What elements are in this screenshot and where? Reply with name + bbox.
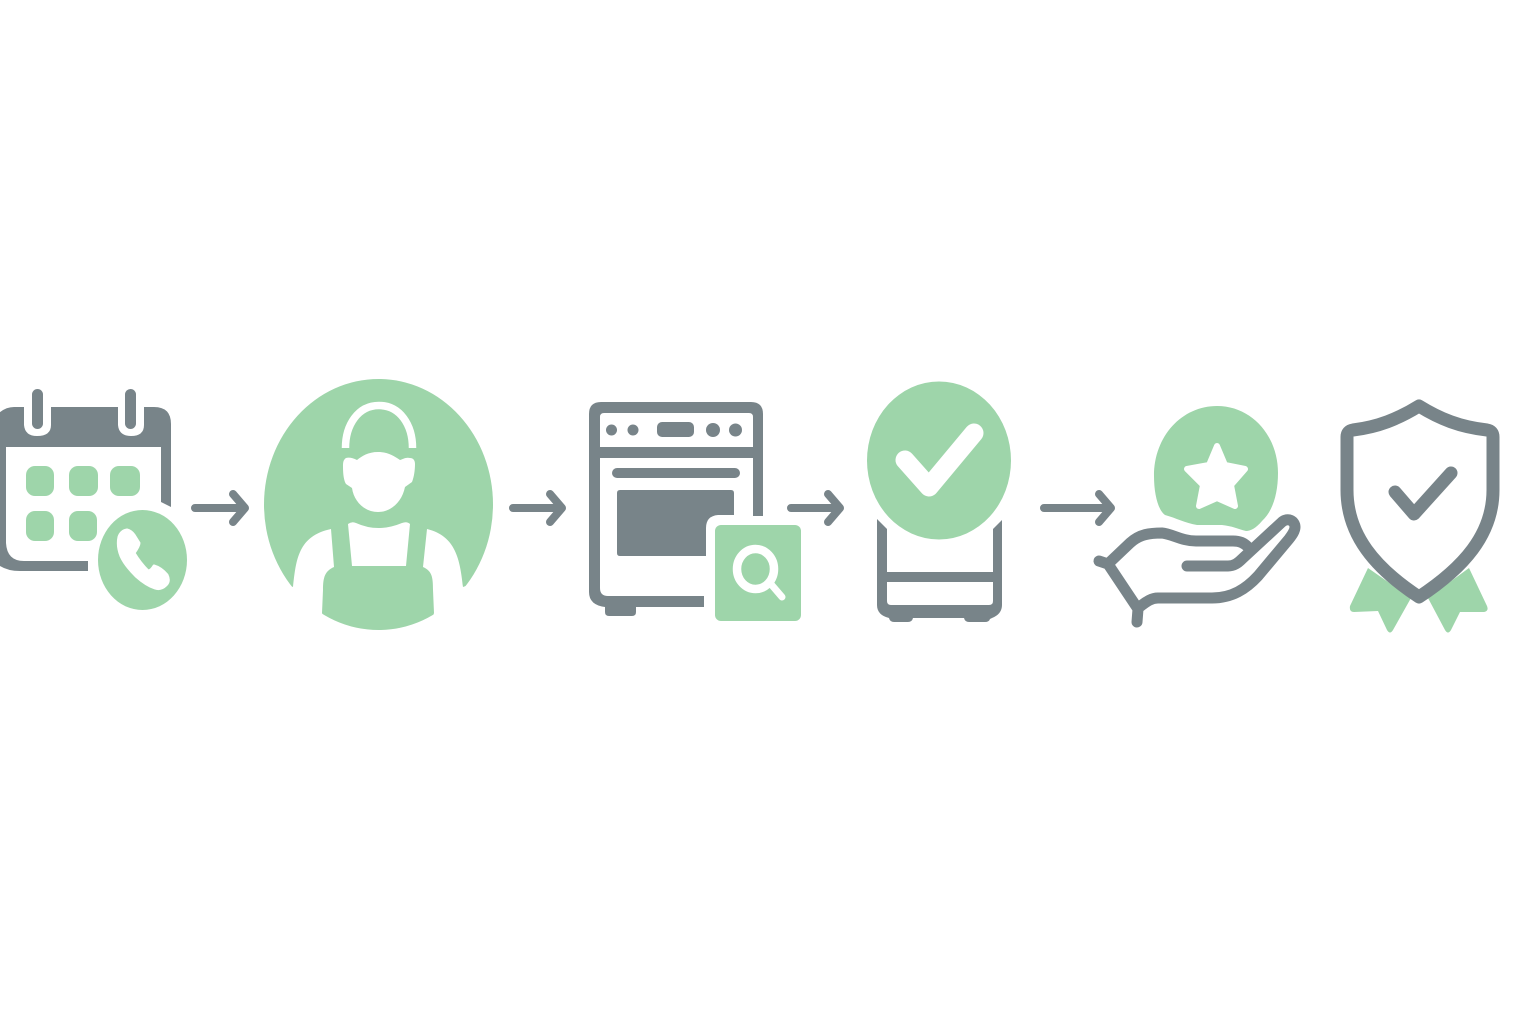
icon: hand holding star badge — [1099, 406, 1295, 622]
arrow: step 4 to step 5 — [1044, 494, 1111, 522]
icon: calendar with phone — [0, 389, 187, 610]
arrow: step 1 to step 2 — [195, 494, 245, 522]
icon: oven inspection — [589, 402, 801, 621]
arrow: step 2 to step 3 — [513, 494, 562, 522]
arrow: step 3 to step 4 — [791, 494, 840, 522]
icon: warranty shield with ribbons — [1347, 406, 1493, 632]
icon: approved appliance — [867, 382, 1011, 622]
icon: technician — [250, 379, 510, 640]
